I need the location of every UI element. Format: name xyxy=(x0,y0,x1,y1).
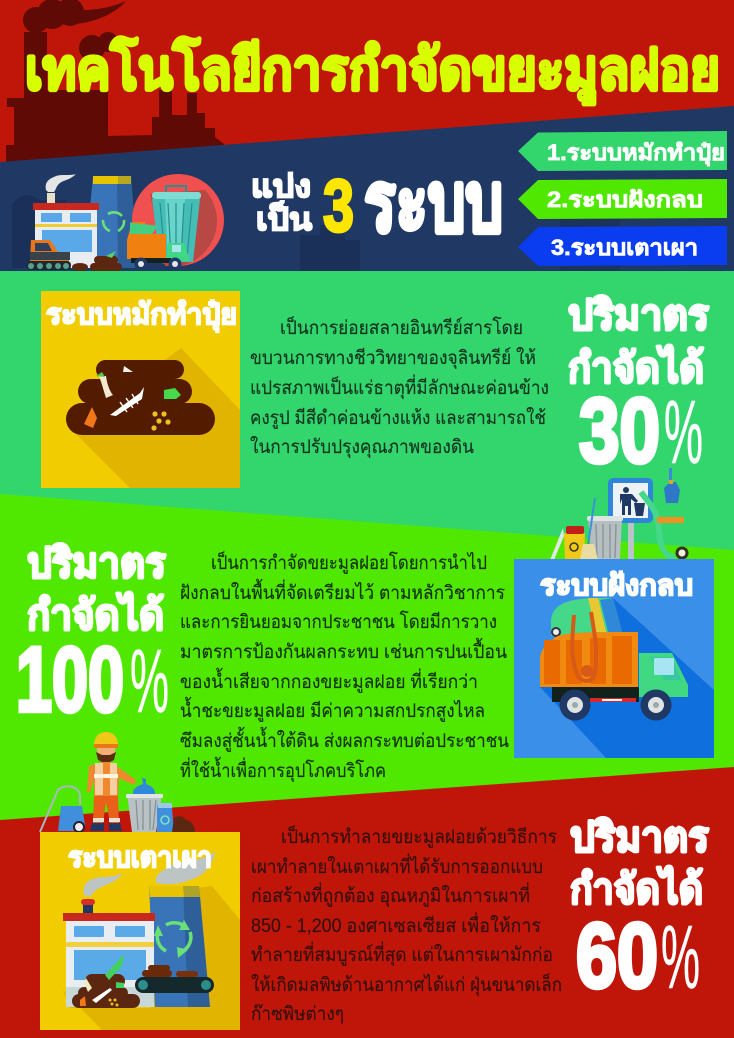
stat: 100 percent: 100 xyxy=(16,629,124,731)
body text: landfill: มาตรการป้องกันผลกระทบ เช่นการปนเปื้อน xyxy=(180,638,507,663)
heading: divide into 3 systems: ระบบ xyxy=(364,155,503,249)
factory illustration xyxy=(63,852,215,1008)
body text: incineration: เผาทำลายในเตาเผาที่ได้รับการออกแบบ xyxy=(251,853,543,878)
card: composting xyxy=(41,291,240,488)
stat: 100 percent: กำจัดได้ xyxy=(27,591,164,638)
factory silhouette behind title xyxy=(6,0,224,170)
building xyxy=(35,206,97,268)
card: landfill xyxy=(514,559,714,758)
heading: divide into 3 systems: เป็น xyxy=(256,200,312,237)
chimney xyxy=(149,886,210,1007)
arrow tag 2: 2.ระบบฝังกลบ xyxy=(547,187,703,212)
card title: ระบบเตาเผา xyxy=(68,842,212,874)
panel: composting section xyxy=(0,271,734,561)
smoke xyxy=(84,873,123,897)
body text: landfill xyxy=(180,550,509,783)
stat: 30 percent: 30 xyxy=(579,380,660,482)
panel: incineration section xyxy=(0,732,734,1038)
trash pile xyxy=(85,974,125,988)
body text: incineration: ให้เกิดมลพิษด้านอากาศได้แก่ ฝุ่นขนาดเล็ก xyxy=(251,972,562,997)
stat: 60 percent: ปริมาตร xyxy=(570,814,709,860)
stat: 30 percent xyxy=(568,292,709,483)
claw xyxy=(669,468,672,482)
recycle arrows xyxy=(157,923,191,951)
background: top red band xyxy=(0,0,734,280)
trash bag xyxy=(133,778,155,795)
arrow tag 3 xyxy=(518,226,727,266)
metal bin xyxy=(127,794,162,832)
illustration: worker with bins xyxy=(40,732,195,832)
card title: ระบบหมักทำปุ๋ย xyxy=(46,299,237,332)
illustration: factory, bin and truck xyxy=(12,174,224,271)
conveyor xyxy=(135,977,214,993)
stat: 100 percent xyxy=(16,540,169,732)
building xyxy=(66,920,154,1007)
stat: 30 percent: กำจัดได้ xyxy=(568,344,704,391)
body text: composting: เป็นการย่อยสลายอินทรีย์สารโดย xyxy=(280,315,523,339)
stat: 60 percent: กำจัดได้ xyxy=(570,865,703,912)
body text: landfill: น้ำชะขยะมูลฝอย มีค่าความสกปรกสูงไหล xyxy=(180,697,485,722)
card: incineration xyxy=(40,832,240,1030)
arrow tag 3: 3.ระบบเตาเผา xyxy=(551,235,698,260)
heading: divide into 3 systems: 3 xyxy=(323,164,354,247)
body text: composting: แปรสภาพเป็นแร่ธาตุที่มีลักษณะค่อนข้าง xyxy=(250,374,549,400)
stat: 60 percent: 60 xyxy=(576,905,658,1007)
person at bin sign xyxy=(620,487,645,516)
bulldozer xyxy=(30,240,69,262)
rubble xyxy=(72,256,122,271)
small stack xyxy=(47,193,55,203)
forbidden circle with bin xyxy=(132,174,224,266)
trash bin xyxy=(152,199,200,262)
yellow bin xyxy=(564,533,585,560)
blue bottle xyxy=(157,803,174,832)
body text: composting: ขบวนการทางชีววิทยาของจุลินทรีย์ ให้ xyxy=(250,347,536,370)
heading: divide into 3 systems xyxy=(251,155,503,249)
worker xyxy=(87,732,136,831)
truck xyxy=(127,222,166,259)
body text: landfill: ฝังกลบในพื้นที่จัดเตรียมไว้ ตามหลักวิชาการ xyxy=(180,579,505,604)
body text: landfill: ของน้ำเสียจากกองขยะมูลฝอย ที่เรียกว่า xyxy=(180,668,478,693)
smoke plume xyxy=(46,174,76,192)
body text: incineration: ก่อสร้างที่ถูกต้อง อุณหภูมิในการเผาที่ xyxy=(251,882,530,908)
stat: 30 percent: ปริมาตร xyxy=(568,292,709,338)
grey bin xyxy=(588,518,622,560)
small stack xyxy=(83,904,93,914)
body text: incineration xyxy=(251,824,562,1025)
broom xyxy=(588,498,595,545)
body text: composting: ในการปรับปรุงคุณภาพของดิน xyxy=(250,436,474,459)
garbage truck xyxy=(540,598,688,720)
heading: divide into 3 systems: แบ่ง xyxy=(251,169,311,204)
body text: incineration: เป็นการทำลายขยะมูลฝอยด้วยวิธีการ xyxy=(281,824,557,848)
arrow tag 1: 1.ระบบหมักทำปุ๋ย xyxy=(547,140,725,167)
rubble xyxy=(172,816,195,832)
stat: 60 percent xyxy=(570,814,709,1008)
panel: landfill section xyxy=(0,468,734,820)
stat: 100 percent: ปริมาตร xyxy=(27,540,166,586)
body text: landfill: และการยินยอมจากประชาชน โดยมีการวาง xyxy=(180,610,497,633)
green pipe xyxy=(641,492,675,558)
body text: landfill: ที่ใช้น้ำเพื่อการอุปโภคบริโภค xyxy=(180,757,386,783)
card title: ระบบฝังกลบ xyxy=(540,570,693,602)
body text: landfill: ซึมลงสู่ชั้นน้ำใต้ดิน ส่งผลกระทบต่อประชาชน xyxy=(180,727,509,752)
dark smoke xyxy=(12,195,66,268)
arrow tag 2 xyxy=(518,179,727,219)
body text: incineration: ทำลายที่สมบูรณ์ที่สุด แต่ในการเผามักก่อ xyxy=(251,941,553,967)
body text: landfill: เป็นการกำจัดขยะมูลฝอยโดยการนำไป xyxy=(211,550,487,574)
body text: incineration: ก๊าซพิษต่างๆ xyxy=(251,1003,344,1025)
compost pile xyxy=(66,360,215,435)
chimney xyxy=(84,176,138,268)
arrow tag 1 xyxy=(518,131,727,171)
body text: incineration: 850 - 1,200 องศาเซลเซียส เพื่อให้การ xyxy=(251,912,541,937)
panel: landfill section: % xyxy=(130,632,169,732)
panel: navy banner xyxy=(0,106,734,272)
illustration: sign, bins and pickup claw xyxy=(550,468,687,560)
body text: composting xyxy=(250,315,549,459)
recycle arrows xyxy=(103,212,124,231)
body text: composting: คงรูป มีสีดำค่อนข้างแห้ง และสามารถใช้ xyxy=(250,407,546,429)
vacuum cleaner xyxy=(40,786,85,832)
